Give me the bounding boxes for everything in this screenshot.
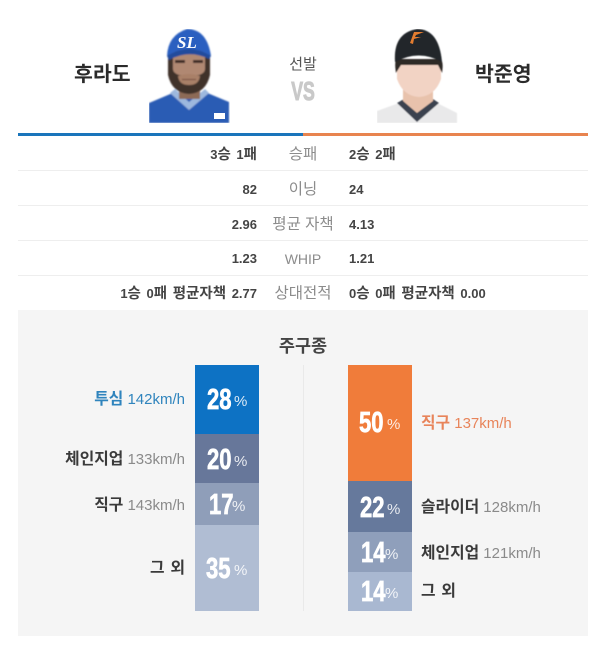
label: left changeup: 체인지업 133km/h [65, 451, 185, 468]
label: left other: 그 외 [150, 560, 185, 577]
bar: left changeup 20%: 20 [207, 444, 232, 476]
bar: right straight 50% [348, 365, 412, 481]
panel: pitch mix [18, 310, 588, 636]
row: innings [242, 181, 364, 198]
row: innings: 82 [243, 182, 257, 197]
row: ERA: 4.13 [349, 217, 374, 232]
row: WHIP: 1.21 [349, 251, 374, 266]
label: right straight: 직구 137km/h [421, 415, 512, 432]
bar: left changeup 20% [195, 434, 259, 483]
team colour line [18, 133, 588, 136]
row: ERA [232, 216, 374, 233]
row: record [210, 146, 396, 163]
row: innings: 이닝 [289, 181, 317, 198]
bar: right straight 50%: % [387, 416, 400, 433]
bar: right changeup 14%: 14 [361, 537, 386, 569]
label: left straight: 직구 143km/h [94, 497, 185, 514]
stats table [18, 146, 588, 302]
bar: right slider 22%: 22 [360, 492, 385, 524]
row: head to head: 상대전적 [274, 285, 332, 302]
bar: right other 14%: % [385, 585, 398, 602]
bar: left other 35% [195, 525, 259, 611]
row: innings: 24 [349, 182, 363, 197]
matchup label [289, 56, 317, 106]
starter label: 선발 [289, 56, 317, 73]
bar: right other 14% [348, 572, 412, 611]
bar: left changeup 20%: % [234, 453, 247, 470]
row: WHIP: WHIP [285, 251, 321, 267]
row: ERA: 평균 자책 [272, 216, 334, 233]
bar: right straight 50%: 50 [359, 407, 384, 439]
player photo: left pitcher [149, 29, 230, 123]
bar: left straight 17%: 17 [209, 489, 234, 521]
bar: left fastball 28% [195, 365, 259, 434]
bar: right other 14%: 14 [361, 576, 386, 608]
label: right slider: 슬라이더 128km/h [421, 499, 541, 516]
bar: right changeup 14%: % [385, 546, 398, 563]
bar: right slider 22% [348, 481, 412, 532]
bar: left straight 17% [195, 483, 259, 525]
row: head to head [120, 285, 486, 302]
VS mark: VS [291, 76, 315, 106]
label: right changeup: 체인지업 121km/h [421, 545, 541, 562]
bar: left fastball 28%: 28 [207, 384, 232, 416]
player photo: left pitcher: SL [177, 33, 197, 52]
player name: right: 박준영 [475, 63, 532, 86]
row: head to head: 0승 0패 평균자책 0.00 [349, 286, 486, 302]
row: ERA: 2.96 [232, 217, 257, 232]
row: record: 3승 1패 [210, 147, 257, 163]
player photo: right pitcher [377, 29, 457, 123]
row: record: 승패 [289, 146, 317, 163]
bar: right changeup 14% [348, 532, 412, 572]
bar: left fastball 28%: % [234, 393, 247, 410]
row: WHIP: 1.23 [232, 251, 257, 266]
label: left fastball: 투심 142km/h [94, 391, 185, 408]
bar: left other 35%: % [234, 562, 247, 579]
label: right other: 그 외 [421, 583, 456, 600]
player name: left: 후라도 [74, 63, 131, 86]
bar: left other 35%: 35 [206, 553, 231, 585]
panel heading: 주구종 [279, 336, 327, 356]
row: WHIP [232, 251, 374, 267]
bar: left straight 17%: % [232, 498, 245, 515]
bar: right slider 22%: % [387, 501, 400, 518]
row: head to head: 1승 0패 평균자책 2.77 [120, 286, 257, 302]
row: record: 2승 2패 [349, 147, 396, 163]
